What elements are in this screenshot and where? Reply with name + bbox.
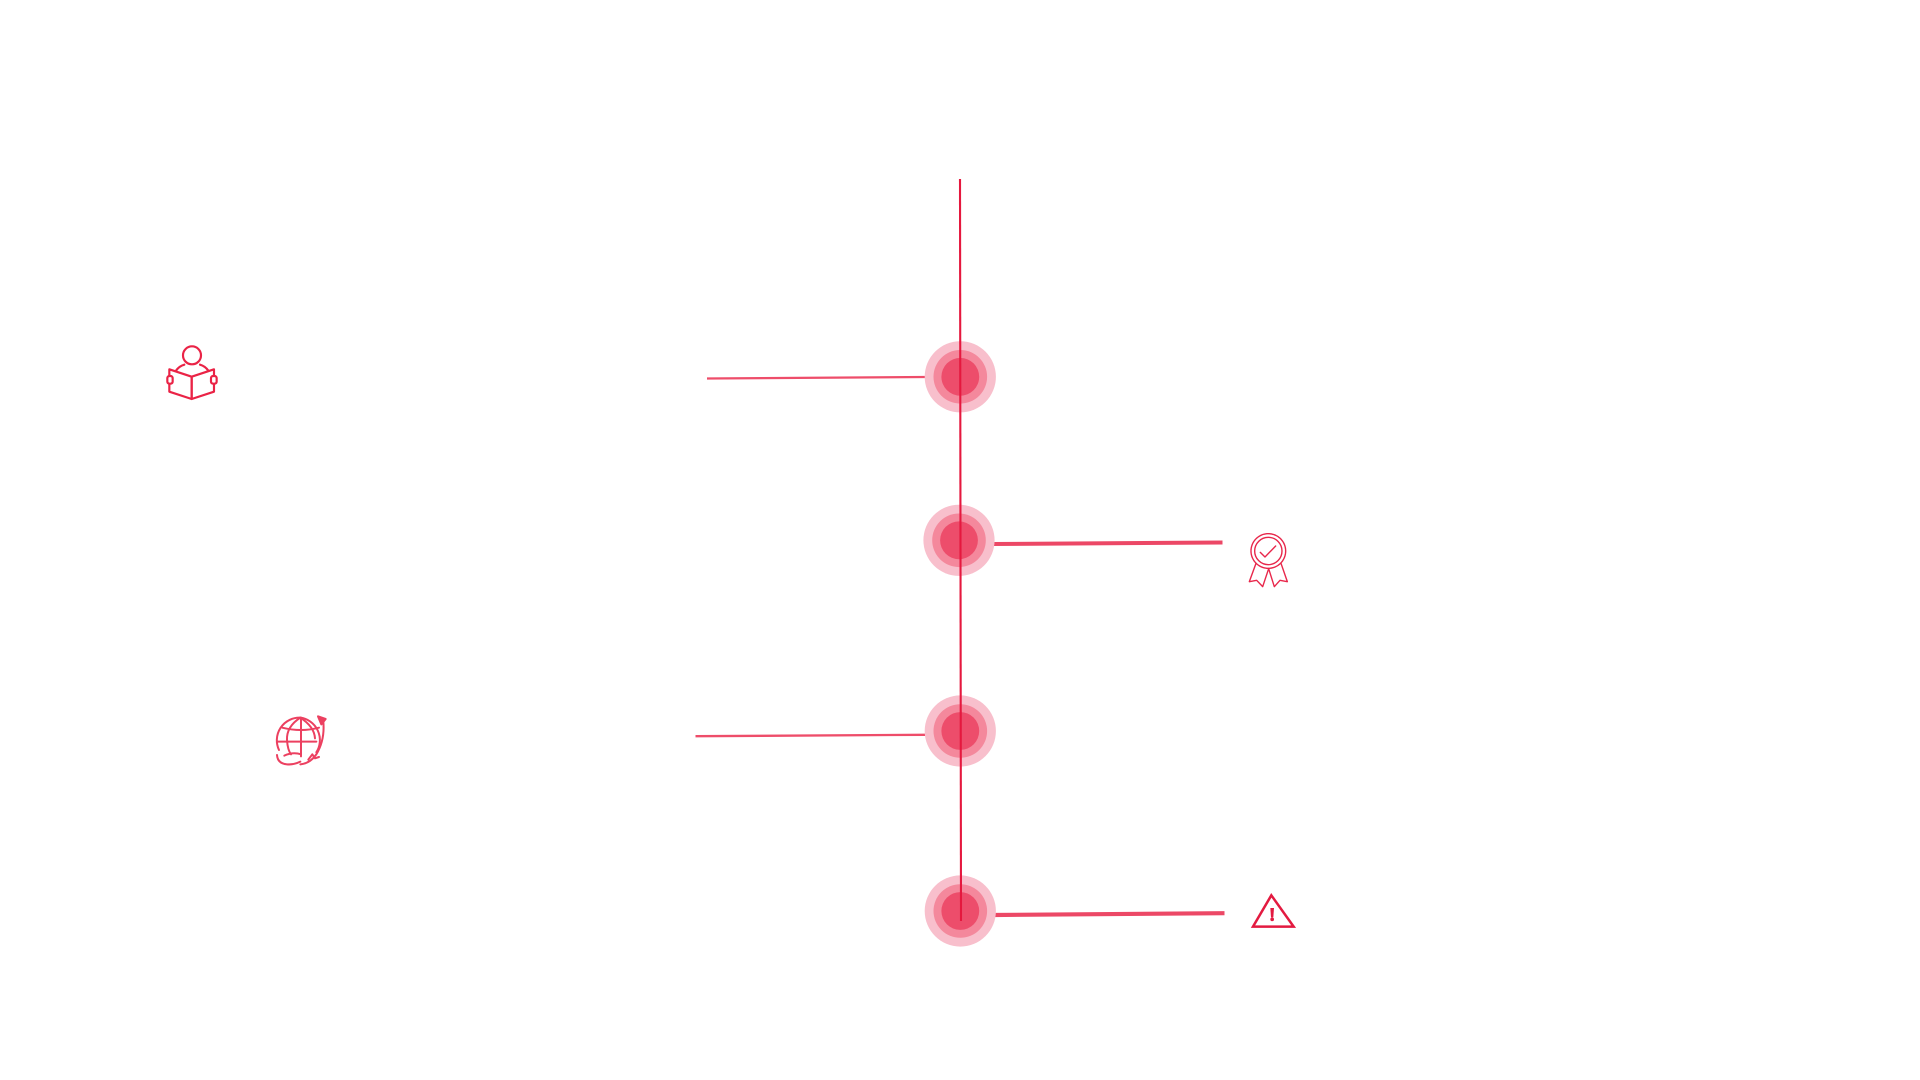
connector: left third	[696, 735, 925, 736]
node 4	[925, 875, 996, 947]
icon: award rosette	[1249, 534, 1287, 587]
connector: left top	[707, 377, 925, 378]
timeline axis	[960, 179, 961, 921]
connector: right second	[992, 542, 1222, 544]
node 1	[925, 341, 996, 412]
icon: person reading book	[167, 346, 217, 399]
node 3	[925, 695, 996, 767]
node 2	[923, 505, 995, 576]
icon: warning triangle	[1253, 895, 1294, 927]
connector: right fourth	[993, 913, 1224, 915]
icon: globe with orbit arrow	[277, 716, 326, 764]
